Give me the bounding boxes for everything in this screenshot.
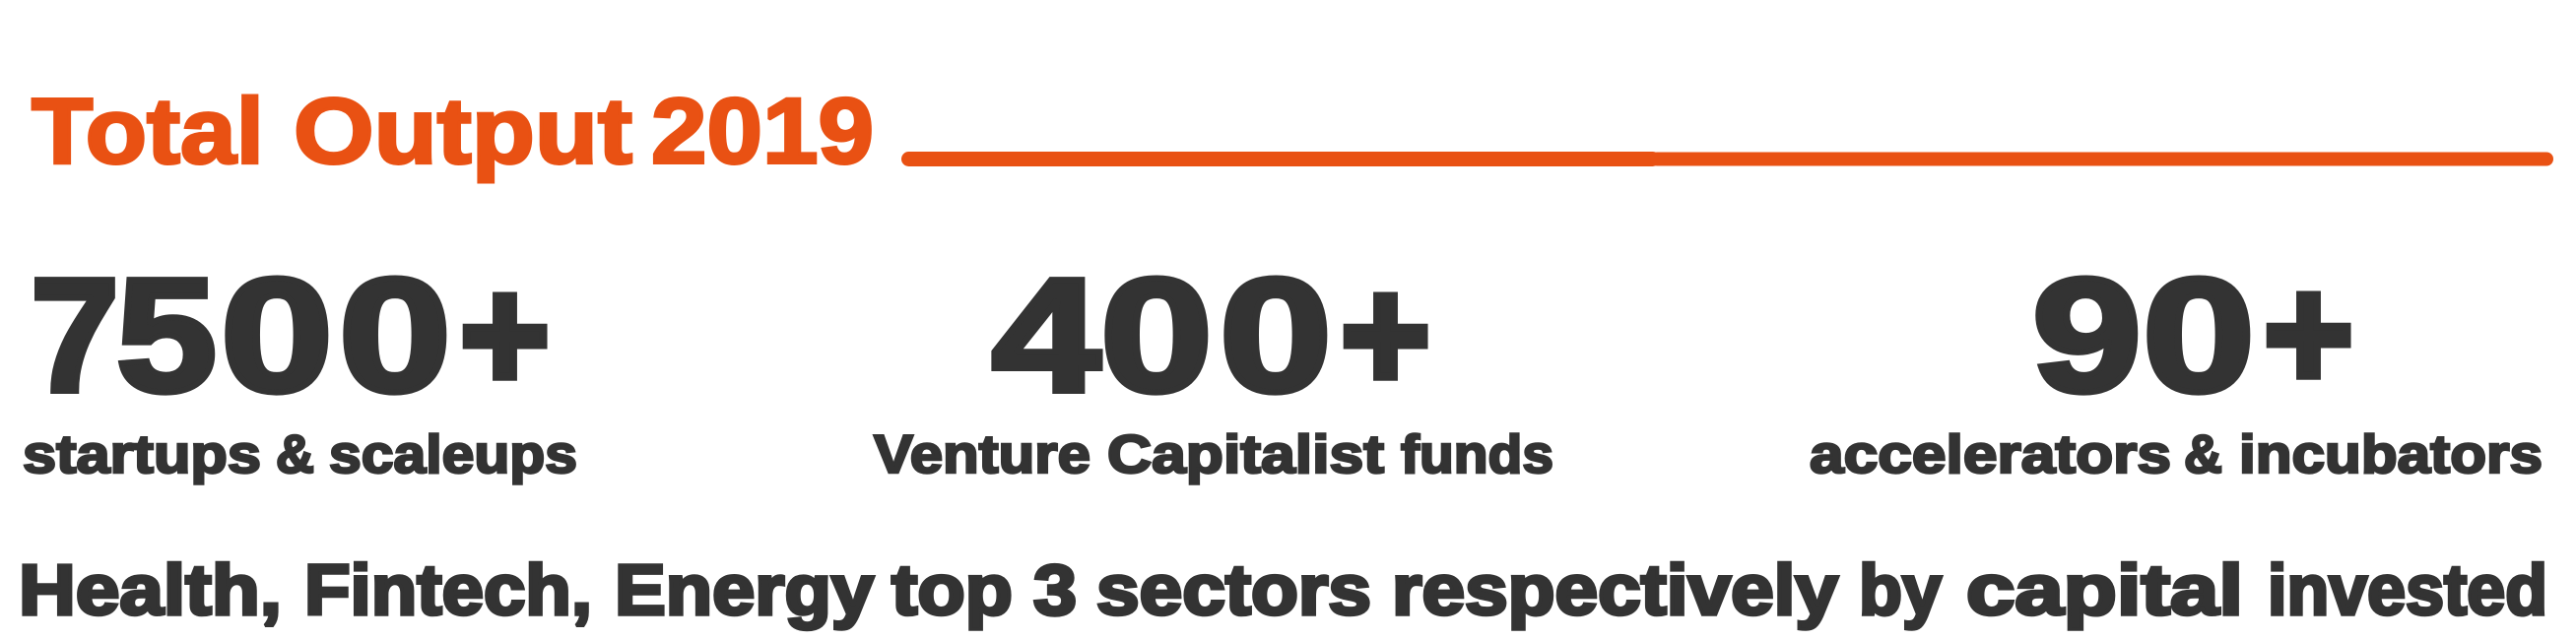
number: 90+	[2032, 244, 2353, 425]
title: 2019	[651, 79, 874, 183]
bottom statement: 3	[1033, 551, 1077, 630]
label: accelerators and incubators: accelerators	[1810, 423, 2171, 484]
number: 7500+: 0	[221, 245, 333, 425]
label: startups and scaleups: scaleups	[329, 423, 577, 484]
number: 7500+	[31, 245, 550, 425]
label: venture capitalist funds	[874, 423, 1553, 484]
bottom statement: respectively	[1392, 551, 1838, 630]
number: 400+: 4	[992, 245, 1100, 425]
number: 90+: 0	[2143, 245, 2255, 425]
label: startups and scaleups	[23, 423, 577, 484]
number: 90+: +	[2264, 244, 2353, 423]
bottom statement: Fintech,	[304, 551, 592, 630]
title	[32, 79, 874, 183]
bottom statement: invested	[2268, 551, 2547, 630]
title: Output	[294, 79, 632, 183]
number: 7500+: 7	[31, 245, 119, 425]
bottom statement: top	[892, 551, 1013, 630]
title: Total	[32, 79, 264, 183]
label: accelerators and incubators	[1810, 423, 2543, 484]
number: 90+: 9	[2032, 245, 2142, 425]
stat: startups and scaleups	[23, 245, 577, 484]
bottom statement: capital	[1966, 551, 2243, 630]
label: accelerators and incubators: &	[2184, 423, 2222, 484]
number: 7500+: 5	[116, 245, 217, 425]
label: venture capitalist funds: Capitalist	[1107, 423, 1384, 484]
bottom statement: Health,	[19, 551, 282, 630]
number: 400+: 0	[1100, 245, 1213, 425]
number: 7500+: +	[460, 246, 550, 423]
stat: venture capitalist funds	[874, 245, 1553, 484]
label: accelerators and incubators: incubators	[2239, 423, 2543, 484]
bottom statement: Energy	[615, 551, 874, 630]
bottom statement	[19, 551, 2547, 630]
label: startups and scaleups: &	[276, 423, 314, 484]
label: startups and scaleups: startups	[23, 423, 261, 484]
heading rule	[901, 152, 2553, 166]
label: venture capitalist funds: Venture	[874, 423, 1090, 484]
label: venture capitalist funds: funds	[1401, 423, 1553, 484]
number: 400+: 0	[1220, 245, 1332, 425]
number: 7500+: 0	[339, 245, 451, 425]
bottom statement: by	[1859, 551, 1942, 630]
bottom statement: sectors	[1096, 551, 1371, 630]
stat: accelerators and incubators	[1810, 244, 2543, 484]
number: 400+: +	[1341, 246, 1430, 423]
number: 400+	[992, 245, 1430, 425]
